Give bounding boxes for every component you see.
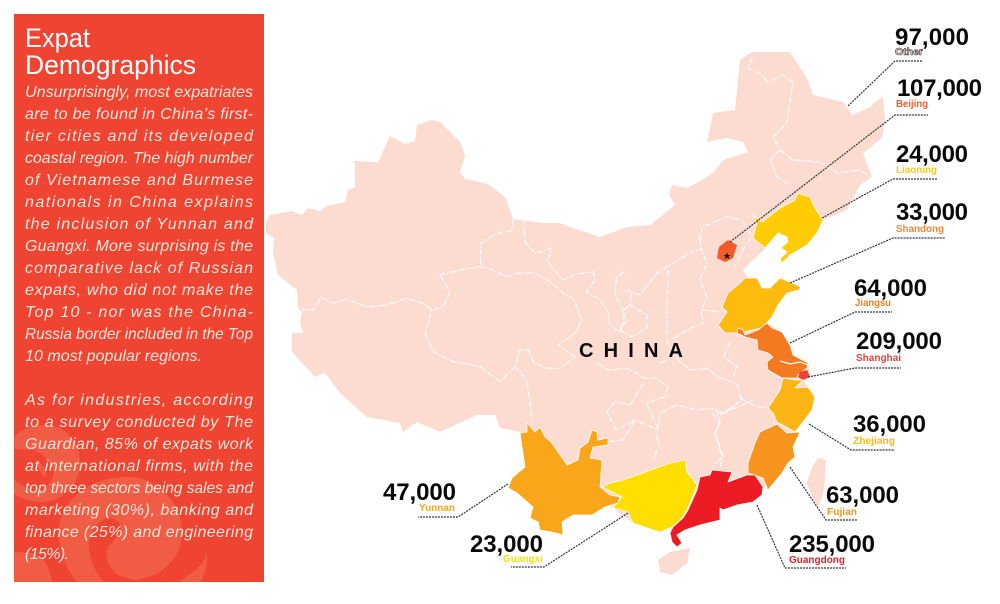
callout: Guangdong: Guangdong [789, 555, 845, 566]
heading: Demographics [25, 50, 196, 80]
callout: Other: 97,000 [895, 24, 969, 51]
callout: Jiangsu: Jiangsu [855, 298, 891, 309]
body text: second paragraph: As for industries, according [24, 392, 253, 409]
callout: Guangxi [470, 513, 628, 567]
city: Shanghai [798, 370, 810, 380]
callout: Other [848, 24, 969, 106]
callout: Beijing: 107,000 [897, 75, 982, 102]
body text: first paragraph: nationals in China explains [25, 194, 253, 211]
callout: Beijing [730, 75, 982, 242]
body text: second paragraph: finance (25%) and engineering [25, 524, 253, 541]
icon: capital star: ★ [723, 251, 731, 261]
province: Yunnan [508, 423, 620, 535]
province: Guangxi [602, 460, 697, 532]
heading: Expat [25, 23, 90, 53]
province: Zhejiang [768, 378, 815, 432]
body text: second paragraph: to a survey conducted by The [25, 414, 253, 431]
body text: first paragraph: Russia border included in the Top [25, 326, 253, 343]
body text: second paragraph: (15%). [25, 546, 69, 563]
body text: first paragraph: Unsurprisingly, most expatriates [25, 84, 253, 101]
province: Liaoning [753, 193, 823, 263]
province: Guangdong [670, 470, 763, 547]
callout: Shandong [790, 199, 968, 283]
callout: Shanghai: 209,000 [856, 328, 942, 355]
panel background [14, 14, 264, 582]
body text: second paragraph [24, 392, 254, 563]
body text: first paragraph [25, 84, 254, 365]
province: Jiangsu [737, 323, 808, 378]
heading [25, 23, 196, 80]
body text: first paragraph: 10 most popular regions. [25, 348, 202, 365]
province borders central [587, 233, 753, 467]
body text: first paragraph: expats, who did not make the [25, 282, 253, 299]
callout: Zhejiang [809, 411, 926, 450]
callout: Liaoning [822, 141, 968, 218]
callout: Guangdong [757, 505, 875, 568]
island: Taiwan [807, 458, 826, 507]
callout: Zhejiang: Zhejiang [853, 436, 895, 447]
body text: first paragraph: comparative lack of Russian [25, 260, 253, 277]
body text: second paragraph: Guardian, 85% of expats work [25, 436, 254, 453]
callout: Yunnan: Yunnan [419, 503, 455, 514]
municipality: Beijing [717, 240, 737, 262]
island: Hainan [658, 548, 690, 575]
callout: Yunnan: 47,000 [383, 479, 456, 506]
body text: first paragraph: of Vietnamese and Burmese [25, 172, 253, 189]
waterway line in Jiangsu [780, 361, 808, 365]
callout: Jiangsu [790, 275, 927, 343]
body text: first paragraph: tier cities and its developed [25, 128, 254, 145]
callout: Other: Other [895, 47, 923, 58]
body text: second paragraph: top three sectors being sales and [25, 480, 254, 497]
callout: Beijing: Beijing [896, 99, 928, 110]
map of China [266, 52, 885, 575]
body text: second paragraph: marketing (30%), banking and [25, 502, 254, 519]
body text: first paragraph: Guangxi. More surprising is the [25, 238, 253, 255]
callout: Fujian: 63,000 [826, 482, 899, 509]
callout: Fujian [790, 467, 899, 520]
callout: Shandong: 33,000 [896, 199, 968, 226]
callout: Guangxi: 23,000 [470, 531, 543, 558]
country label: CHINA [579, 340, 683, 362]
body text: second paragraph: at international firms, with the [25, 458, 253, 475]
panel: expat demographics [14, 14, 264, 582]
province: Shandong [718, 278, 801, 333]
callout: Liaoning: 24,000 [896, 141, 968, 168]
callout: Shanghai [808, 328, 942, 377]
callout: Fujian: Fujian [827, 507, 857, 518]
callout: Guangxi: Guangxi [503, 554, 543, 565]
callout: Zhejiang: 36,000 [853, 411, 926, 438]
callout: Jiangsu: 64,000 [854, 275, 927, 302]
decorative swirl motifs [14, 425, 207, 582]
province borders west [302, 220, 595, 423]
callout: Yunnan [383, 479, 508, 517]
province: Fujian [748, 424, 800, 490]
callout: Shandong: Shandong [896, 224, 944, 235]
body text: first paragraph: Top 10 - nor was the China- [25, 304, 253, 321]
callout: Shanghai: Shanghai [856, 353, 901, 364]
mainland base shape [266, 52, 885, 530]
body text: first paragraph: the inclusion of Yunnan and [25, 216, 254, 233]
province borders east [700, 58, 870, 467]
body text: first paragraph: coastal region. The high number [25, 150, 254, 167]
callout: Guangdong: 235,000 [789, 531, 875, 558]
callout: Liaoning: Liaoning [896, 165, 937, 176]
body text: first paragraph: are to be found in China’s first- [25, 106, 253, 123]
